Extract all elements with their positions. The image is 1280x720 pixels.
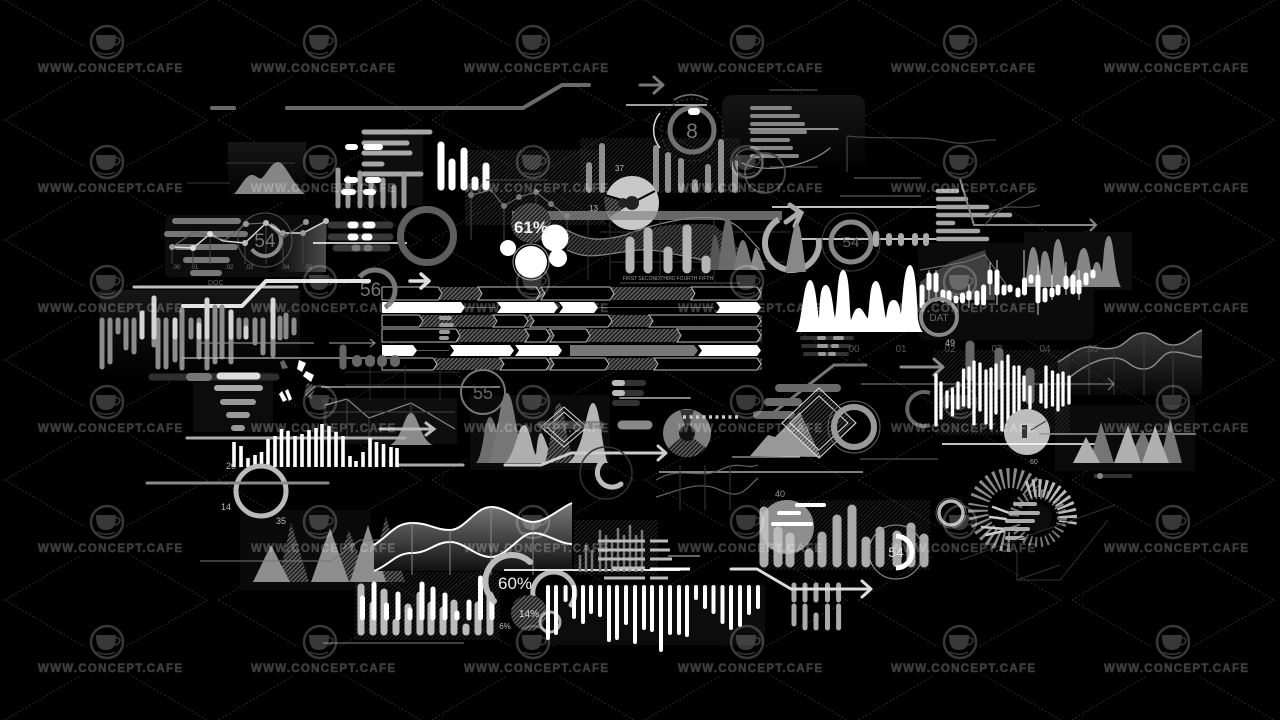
ring: DAT [921,299,957,335]
white segments [382,302,761,356]
wave area chart: lower center [374,503,572,575]
candle bars: left [102,298,294,368]
long light line under bars [187,438,463,465]
watermark text: WWW.CONCEPT.CAFE [678,303,822,315]
pie gauge [604,176,659,230]
wave lines: lower center [656,465,758,510]
ring: right of diamond [828,401,880,453]
ring gauge: 54 lower: 54 [888,544,904,560]
watermark text: WWW.CONCEPT.CAFE [1104,543,1248,555]
ring with arrow [761,205,823,274]
watermark text: WWW.CONCEPT.CAFE [38,303,182,315]
candlestick chart [922,250,1093,315]
outline segments [382,287,761,370]
wave area chart: right [1058,330,1202,395]
panel: line chart with list and ring 54 [167,213,329,287]
bar chart: FIRST to FIFTH: FIRST [623,276,637,282]
white bar chart: lower left [234,424,397,467]
gray bars under arrow [794,585,839,628]
list bars [167,221,245,273]
axis labels: 00 to 05: 05 [1087,344,1099,355]
list rows: right [938,191,1010,239]
watermark text: WWW.CONCEPT.CAFE [464,423,608,435]
thin waves: right [840,178,1040,225]
watermark text: WWW.CONCEPT.CAFE [891,543,1035,555]
watermark text: WWW.CONCEPT.CAFE [251,63,395,75]
watermark text: WWW.CONCEPT.CAFE [891,423,1035,435]
labels: 20, 14, 35: 35 [276,516,286,526]
diamond: right [782,388,856,458]
gray bar cluster [338,170,404,206]
axis labels: .02 [225,265,234,271]
axis labels: .03 [245,265,254,271]
watermark text: WWW.CONCEPT.CAFE [1104,183,1248,195]
triangle chart: lower left [200,517,405,582]
chevron progress panel [382,287,762,370]
thin wave line chart: top right [847,136,996,172]
line series [172,221,326,248]
hatch circle: 14% [511,595,547,631]
arrow: 901 to 943 [901,359,943,375]
ring gauge: 55 [461,370,505,414]
small pills: center right [541,383,690,425]
arrow: top [640,77,663,93]
hatch circle: 14%: 14% [519,609,539,620]
kinked white line [134,281,369,306]
long horizontal bar [512,211,782,220]
ring gauge: 54 right: 54 [843,234,859,251]
watermark text: WWW.CONCEPT.CAFE [38,183,182,195]
axis labels [172,265,313,271]
watermark text: WWW.CONCEPT.CAFE [891,63,1035,75]
translucent circle with pills [760,500,824,554]
ring gauge: 60%: 60% [498,574,532,593]
ring gauge: 54 lower [869,525,923,579]
hatched tracks [382,287,762,370]
small ring: lower [540,612,560,632]
dotted white row [683,415,741,419]
bar chart: FIRST to FIFTH [620,229,740,283]
watermark text: WWW.CONCEPT.CAFE [1104,663,1248,675]
watermark text: WWW.CONCEPT.CAFE [891,183,1035,195]
bar chart: FIRST to FIFTH: THIRD [660,276,676,282]
gray line across ring [147,482,328,484]
area shading [268,221,326,272]
list rows: lower left [152,376,276,428]
white long line [504,569,680,571]
axis labels: 00 to 05: 00 [848,344,860,355]
watermark text: WWW.CONCEPT.CAFE [678,63,822,75]
dot pills: right [876,234,926,244]
watermark text: WWW.CONCEPT.CAFE [891,303,1035,315]
line chart with bell [325,399,455,445]
ring gauge: 55: 55 [473,383,493,403]
ring gauge: 56: 56 [360,280,381,301]
dark background panels [100,95,1195,645]
radial burst [978,459,1068,542]
bar chart: FIRST to FIFTH: FOURTH [677,276,698,282]
long thin line: mid [321,386,500,388]
ring: center bottom [580,447,632,499]
label: 6%: 6% [499,622,511,631]
white pills [344,147,380,192]
axis labels: 00 to 05 [848,344,1099,355]
watermark text: WWW.CONCEPT.CAFE [38,543,182,555]
thin lines: right center [732,378,1114,472]
axis labels: 00 to 05: 03 [991,344,1003,355]
axis labels: .04 [281,265,290,271]
label: 49: 49 [945,338,955,348]
watermark text: WWW.CONCEPT.CAFE [678,663,822,675]
peaks chart: center [476,393,608,463]
mini area chart [187,162,305,194]
big bar chart: lower right [764,509,924,563]
ring gauge: 56 [360,270,395,307]
watermark text: WWW.CONCEPT.CAFE [891,663,1035,675]
bar chart: gray and white lower [361,578,492,632]
ring 54: 54 [254,231,276,252]
white lines under pie [942,434,1196,444]
white bars: right [936,356,1069,430]
watermark text: WWW.CONCEPT.CAFE [251,663,395,675]
isometric thin frame [960,505,1115,580]
thin lower line [323,642,464,644]
watermark text: WWW.CONCEPT.CAFE [464,63,608,75]
watermark text: WWW.CONCEPT.CAFE [464,663,608,675]
labels: 37 and 13 [589,164,624,213]
watermark text: WWW.CONCEPT.CAFE [251,423,395,435]
line chart: dots [468,180,570,240]
list rows: upper left [364,132,430,174]
grid panel: mid [345,366,460,400]
axis labels: 00 to 05: 04 [1039,344,1051,355]
pie gauge: right [1004,409,1050,455]
mountain chart and line [750,365,866,457]
watermark text: WWW.CONCEPT.CAFE [38,423,182,435]
ring 54 [238,213,292,267]
small stacked pills over chevrons [441,318,452,338]
bar chart: gray top [589,142,735,190]
axis labels: 00 to 05: 01 [895,344,907,355]
bubble cluster: 61%: 61% [514,218,548,237]
ring gauge: 8: 8 [686,120,698,143]
watermark text: WWW.CONCEPT.CAFE [1104,63,1248,75]
list panel: top right [742,90,838,168]
watermark text: WWW.CONCEPT.CAFE [678,183,822,195]
gray pills behind white bars [970,345,1030,400]
labels: 37 and 13: 37 [615,164,624,173]
watermark text: WWW.CONCEPT.CAFE [38,63,182,75]
watermark text: WWW.CONCEPT.CAFE [464,543,608,555]
arrow: 56 ring [410,274,429,288]
white peaks chart [796,265,923,332]
axis labels: .05 [304,265,313,271]
bubble cluster: 61% [500,203,568,280]
watermark text: WWW.CONCEPT.CAFE [38,663,182,675]
axis labels: .00 [172,265,181,271]
white line: center left [313,242,407,244]
area chart: ghost right [920,250,1010,300]
grid lines [172,221,326,264]
labels: 20, 14, 35 [221,461,286,526]
thin lines and arrows: mid left [182,339,375,358]
watermark text: WWW.CONCEPT.CAFE [1104,423,1248,435]
pill rows: center left [331,225,390,248]
radial burst: 60 [1030,459,1038,466]
pie gauge: center [663,409,711,457]
spinner [279,360,316,402]
kinked arrow: center [505,446,666,465]
watermark text: WWW.CONCEPT.CAFE [678,423,822,435]
watermark text: WWW.CONCEPT.CAFE [464,183,608,195]
gray peaks chart [1024,236,1121,287]
axis labels: .01 [190,265,199,271]
watermark text: WWW.CONCEPT.CAFE [1104,303,1248,315]
ring: lower left [236,466,286,516]
dense bars with rows [580,525,700,578]
ghost rings: top [734,149,785,193]
gray bar in row five [570,345,698,356]
small ring [936,498,966,528]
hatched wave area: center [567,215,790,280]
watermark text: WWW.CONCEPT.CAFE [251,303,395,315]
labels: 37 and 13: 13 [589,204,598,213]
ring: DAT: DAT [929,313,949,324]
arrow: thin kinked right [960,179,1096,231]
watermark text: WWW.CONCEPT.CAFE [251,543,395,555]
arc ring: right of 60% [533,572,575,605]
white lines: middle [772,207,987,239]
blob pills [343,348,395,366]
top kinked line [212,85,589,108]
triangle chart: right [1073,418,1182,463]
white bar chart: top [441,145,486,187]
ring gauge: 60% [485,555,532,601]
watermark logos [91,26,1189,658]
labels: 20, 14, 35: 20 [226,461,236,471]
white hanging bars [548,587,758,650]
pill rows under peaks [802,338,852,354]
kinked arrow: lower right [731,569,871,597]
label: 40: 40 [775,489,785,499]
bar chart: FIRST to FIFTH: FIFTH [699,276,713,282]
bar chart: FIRST to FIFTH: SECOND [638,276,660,282]
ring arc: behind bars [907,392,930,426]
peaks: hatched center [708,217,766,270]
DOC label: DOC [208,280,224,287]
diamond: center [541,407,587,447]
axis labels: 00 to 05: 02 [944,344,956,355]
watermark text: WWW.CONCEPT.CAFE [678,543,822,555]
ring gauge: 54 right [822,213,880,271]
small legend: right [1094,473,1132,479]
big ring [400,210,454,262]
watermark text: WWW.CONCEPT.CAFE [464,303,608,315]
watermark text: WWW.CONCEPT.CAFE [251,183,395,195]
bright line under mountain [659,471,863,473]
ring gauge: 8 [626,95,723,161]
labels: 20, 14, 35: 14 [221,502,231,512]
